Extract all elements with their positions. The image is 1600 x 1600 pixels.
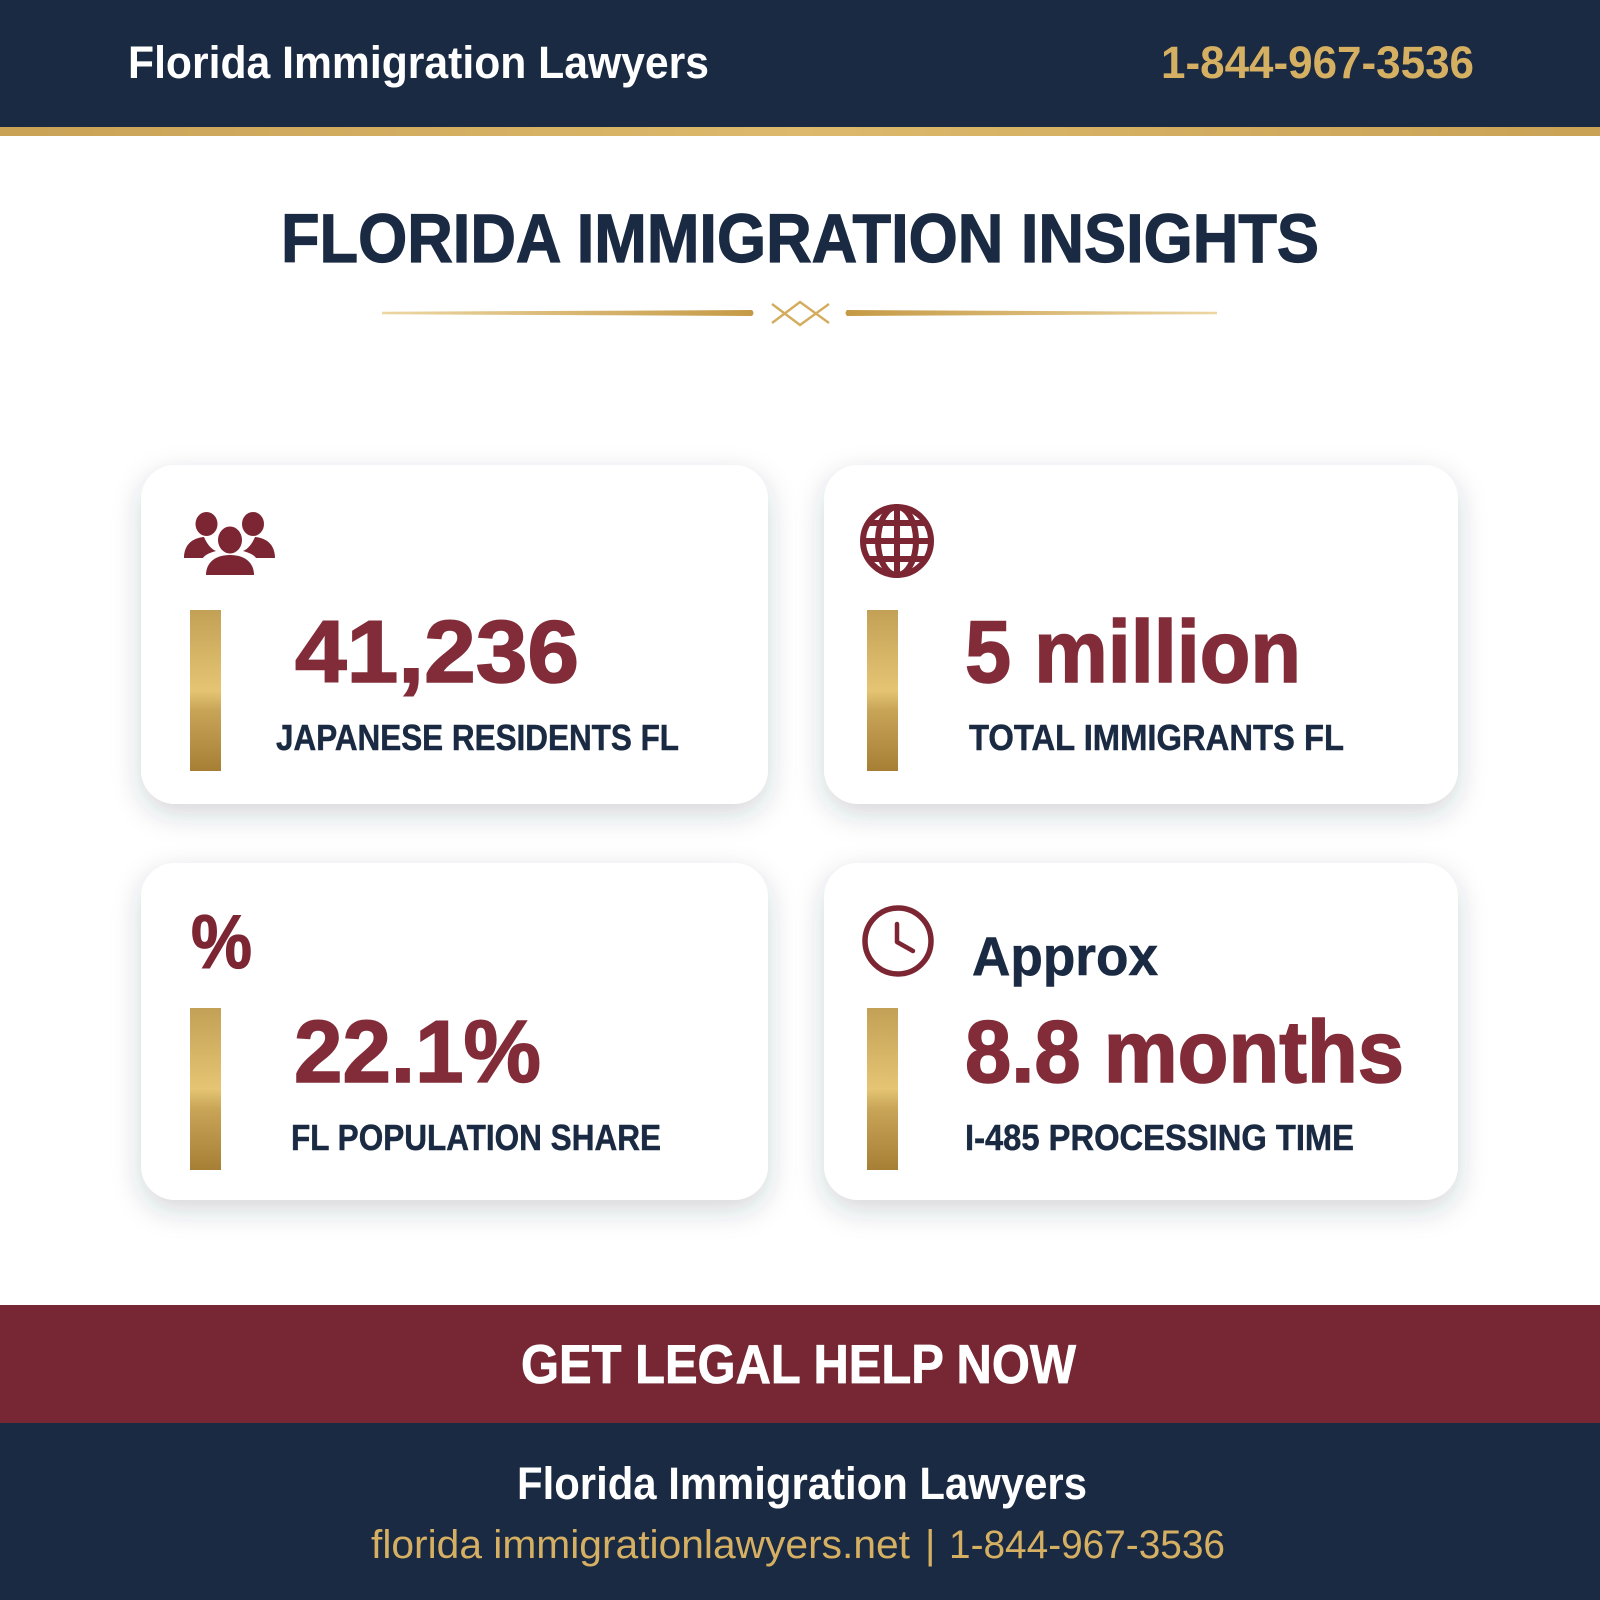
label: JAPANESE RESIDENTS FL — [276, 717, 679, 758]
header firm name: Florida Immigration Lawyers — [128, 37, 709, 88]
accent bar — [190, 610, 221, 771]
accent bar — [867, 610, 898, 771]
header phone number: 1-844-967-3536 — [1161, 37, 1474, 88]
icon: globe — [863, 506, 931, 576]
label: I-485 PROCESSING TIME — [965, 1117, 1354, 1158]
value: 5 million — [965, 602, 1301, 701]
icon: people group — [184, 512, 275, 575]
accent bar — [190, 1008, 221, 1170]
label: FL POPULATION SHARE — [291, 1117, 661, 1158]
label: TOTAL IMMIGRANTS FL — [969, 717, 1344, 758]
call to action banner — [0, 1305, 1600, 1423]
title divider — [382, 302, 1217, 325]
card: Japanese residents — [141, 465, 768, 804]
footer — [0, 1423, 1600, 1600]
card: total immigrants — [824, 465, 1458, 804]
approx qualifier: Approx — [972, 925, 1158, 987]
card: population share — [141, 863, 768, 1200]
footer website and phone: 1-844-967-3536 — [949, 1523, 1225, 1567]
value: 41,236 — [295, 602, 579, 701]
header bar — [0, 0, 1600, 136]
accent bar — [867, 1008, 898, 1170]
footer website and phone: | — [925, 1523, 935, 1567]
call to action text: GET LEGAL HELP NOW — [521, 1333, 1076, 1395]
value: 8.8 months — [965, 1002, 1404, 1101]
footer firm name: Florida Immigration Lawyers — [517, 1458, 1087, 1509]
title: FLORIDA IMMIGRATION INSIGHTS — [281, 200, 1319, 277]
icon: clock — [865, 908, 931, 974]
card: processing time — [824, 863, 1458, 1200]
icon: percent: % — [191, 900, 252, 985]
footer website and phone: florida immigrationlawyers.net — [371, 1523, 910, 1567]
value: 22.1% — [294, 1002, 541, 1101]
